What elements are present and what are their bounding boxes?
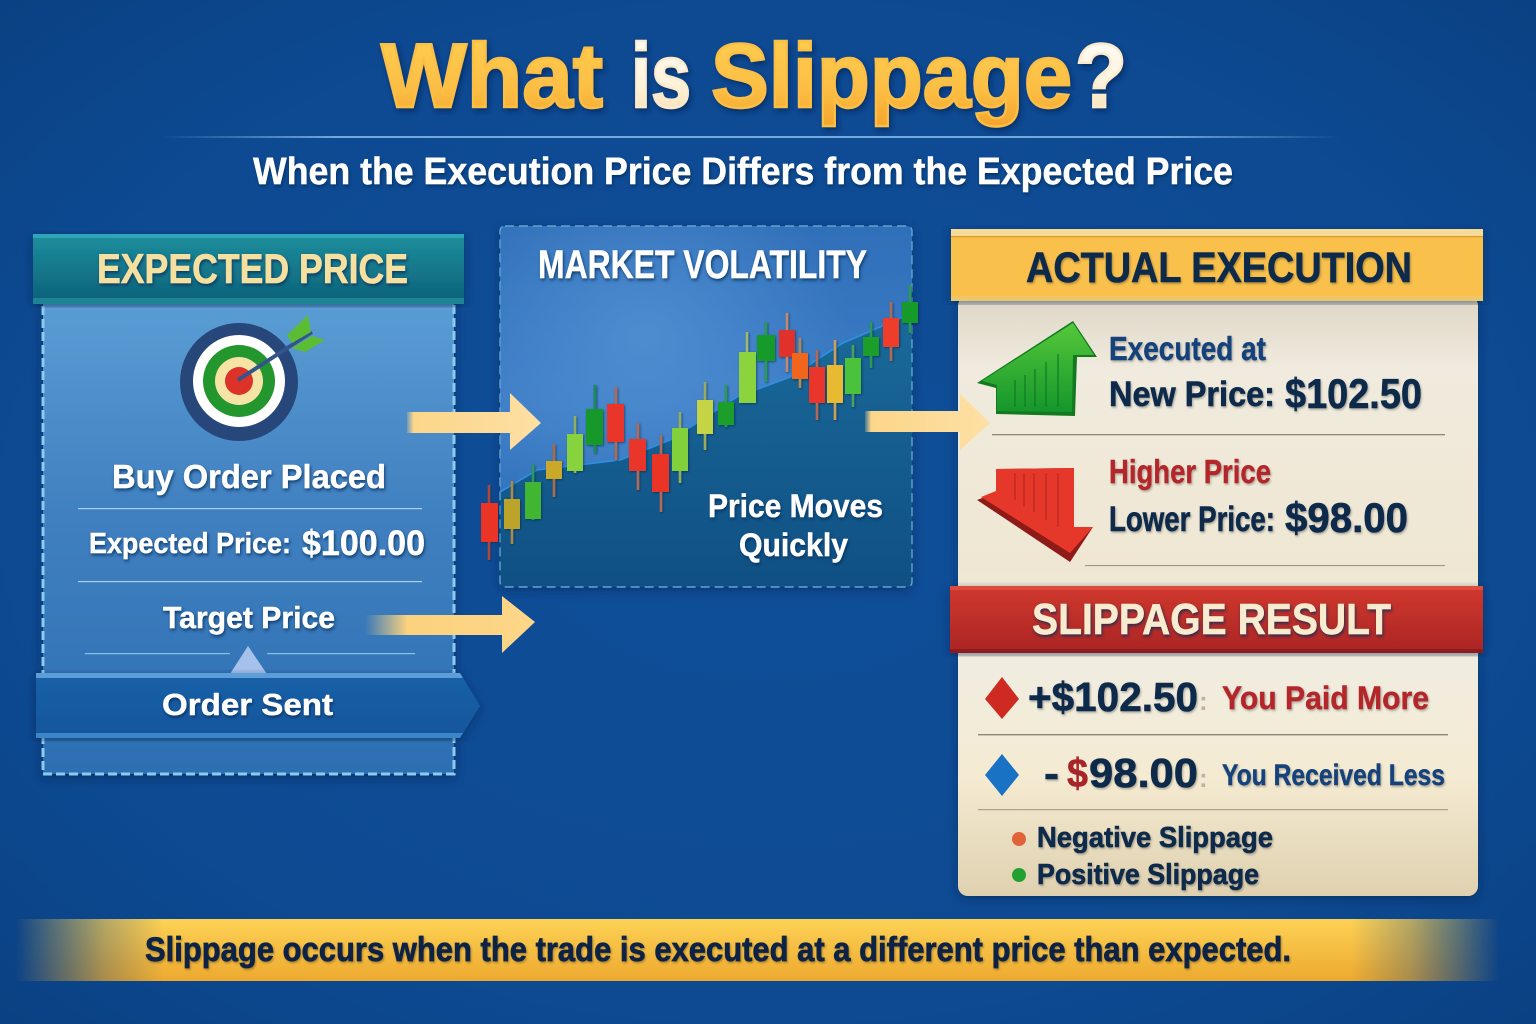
panel body xyxy=(958,296,1478,896)
footer strip: Slippage occurs when the trade is executed at a different price than expected. xyxy=(145,931,1291,969)
banner: order sent: Order Sent xyxy=(162,687,333,722)
result row: received less xyxy=(985,750,1445,796)
text: expected price value: $100.00 xyxy=(302,524,425,563)
banner: order sent xyxy=(36,673,480,738)
subtitle: When the Execution Price Differs from the Expected Price xyxy=(253,151,1233,193)
text: price moves quickly: Price Moves xyxy=(708,488,883,524)
panel body xyxy=(43,300,454,774)
text: higher price lower price: Higher Price xyxy=(1109,453,1271,490)
result row: received less: 98.00 xyxy=(1089,750,1198,796)
result row: paid more: : xyxy=(1199,686,1208,716)
icon: red diamond xyxy=(985,677,1019,719)
text: higher price lower price: Lower Price: xyxy=(1109,500,1275,539)
panel: market volatility xyxy=(481,226,918,587)
text: expected price value: Expected Price: xyxy=(89,528,291,560)
result row: paid more: +$102.50 xyxy=(1028,674,1198,720)
title: What xyxy=(381,26,603,127)
text: target price: Target Price xyxy=(163,600,335,635)
panel: expected price xyxy=(33,234,480,774)
result row: received less: $ xyxy=(1067,750,1088,796)
icon: green up arrow xyxy=(977,321,1097,416)
legend: Positive Slippage xyxy=(1037,859,1259,891)
footer strip xyxy=(15,919,1500,981)
heading: actual execution: ACTUAL EXECUTION xyxy=(1026,244,1412,292)
text: expected price value xyxy=(89,524,425,563)
title: is xyxy=(631,26,691,127)
title xyxy=(381,26,1127,127)
icon: small pointer triangle xyxy=(228,646,269,677)
icon: red down arrow xyxy=(977,468,1093,562)
title: ? xyxy=(1075,26,1127,127)
candlestick chart xyxy=(481,285,918,560)
result row: received less: You Received Less xyxy=(1222,759,1445,792)
arrow: expected to market xyxy=(407,393,541,450)
arrow: market to execution xyxy=(865,394,990,450)
title: Slippage xyxy=(711,26,1072,127)
text: price moves quickly: Quickly xyxy=(739,527,848,563)
heading: expected price: EXPECTED PRICE xyxy=(97,245,408,292)
heading: market volatility: MARKET VOLATILITY xyxy=(538,243,867,287)
panel: actual execution xyxy=(950,229,1483,896)
result row: paid more: You Paid More xyxy=(1222,680,1429,716)
legend: Negative Slippage xyxy=(1037,822,1273,854)
text: executed at new price: New Price: xyxy=(1109,375,1275,414)
area under price line xyxy=(500,313,912,587)
result row: received less: - xyxy=(1044,750,1059,796)
icon: target with dart xyxy=(180,315,325,441)
result row: paid more xyxy=(985,674,1429,720)
price trend line xyxy=(500,313,912,492)
heading: actual execution xyxy=(951,229,1483,301)
icon: blue diamond xyxy=(985,754,1019,796)
heading: slippage result: SLIPPAGE RESULT xyxy=(1032,595,1391,644)
text: executed at new price: $102.50 xyxy=(1285,370,1422,417)
text: executed at new price: Executed at xyxy=(1109,330,1266,367)
text: executed at new price xyxy=(1109,330,1422,417)
text: price moves quickly xyxy=(708,488,883,563)
text: higher price lower price xyxy=(1109,453,1408,541)
panel background xyxy=(500,226,912,587)
text: higher price lower price: $98.00 xyxy=(1285,494,1408,541)
heading: slippage result xyxy=(950,586,1483,653)
legend xyxy=(1012,822,1273,891)
heading: expected price xyxy=(33,234,464,304)
arrow: target to market xyxy=(365,596,535,653)
result row: received less: : xyxy=(1199,763,1208,793)
text: buy order placed: Buy Order Placed xyxy=(112,458,386,495)
